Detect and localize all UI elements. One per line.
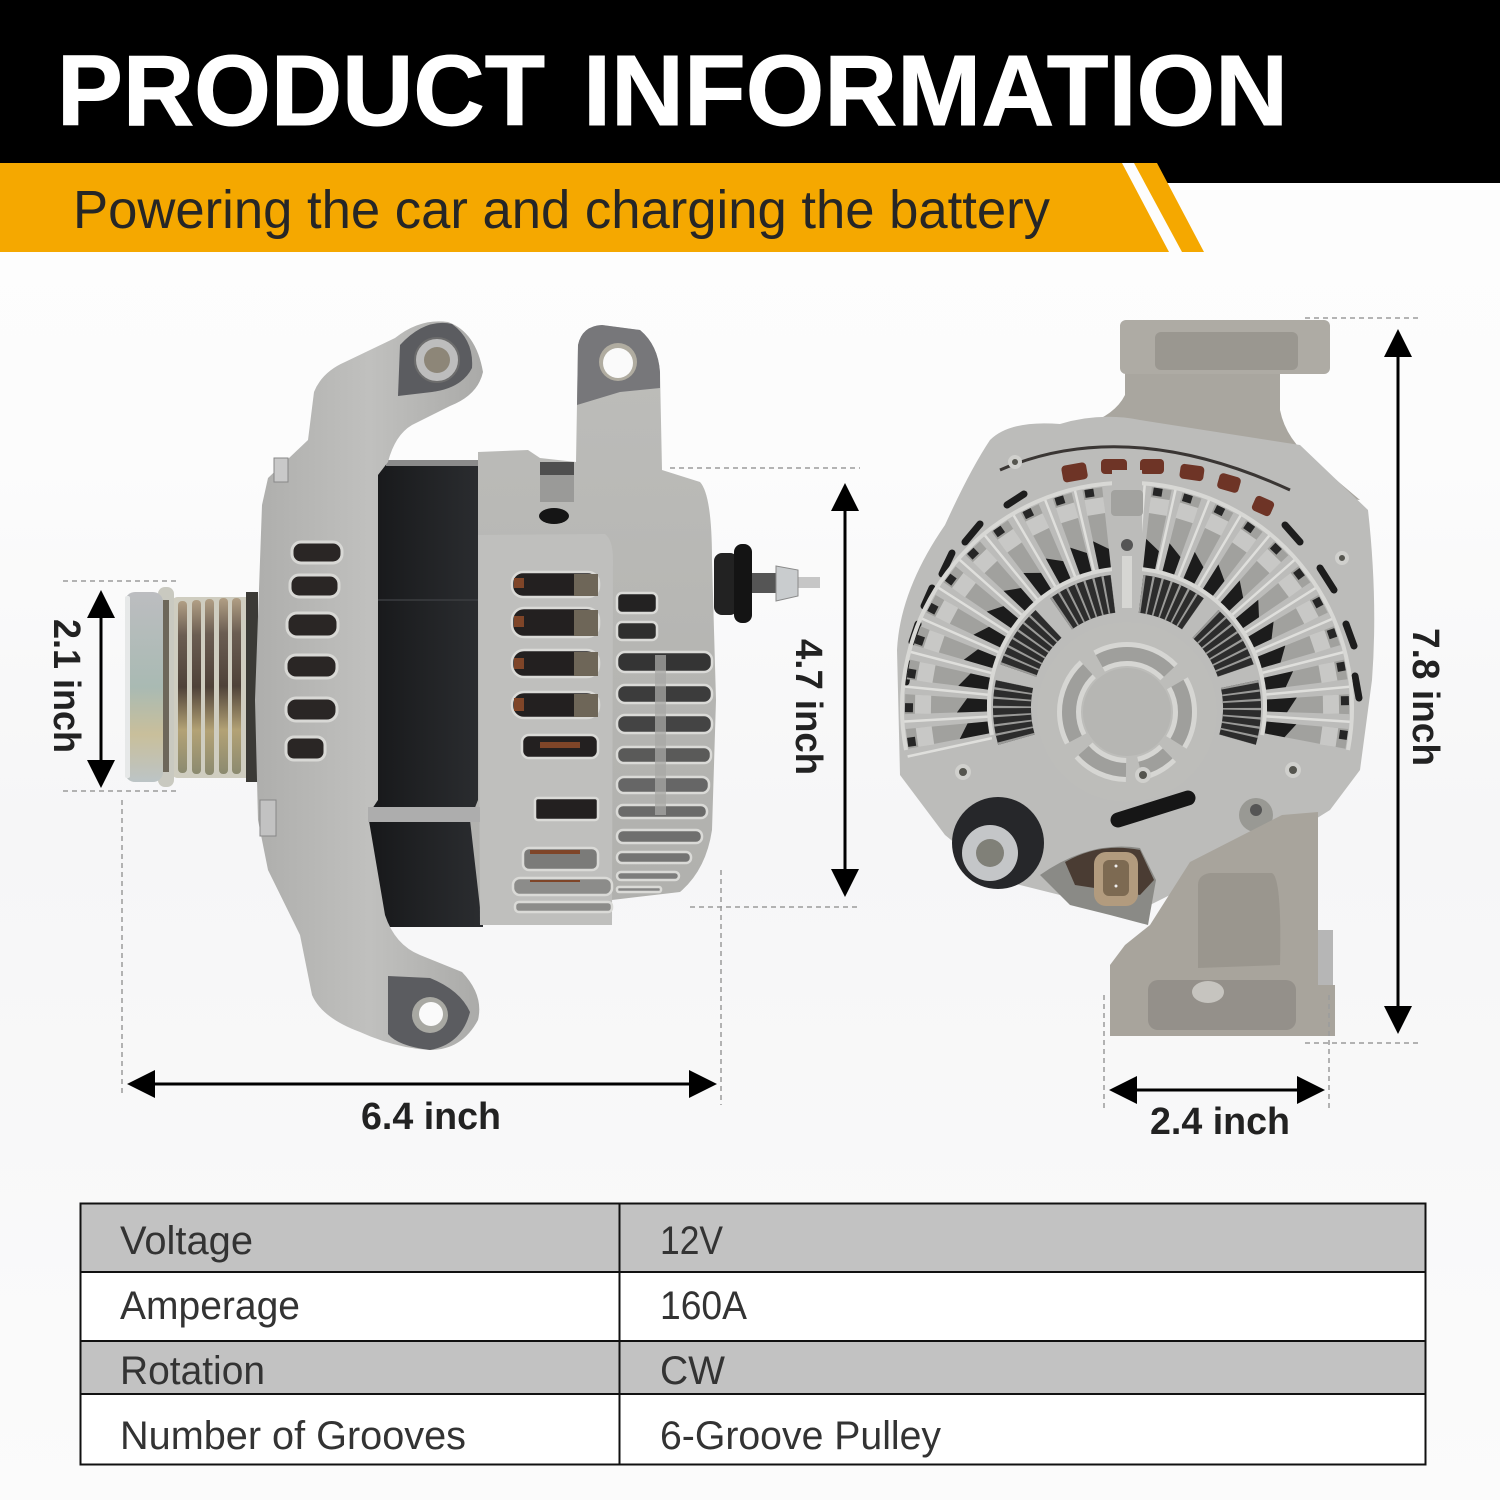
top centre cell <box>1111 470 1143 610</box>
pulley <box>125 587 258 787</box>
output terminal <box>952 797 1044 889</box>
dimension: 2.4 inch: 2.4 inch <box>1150 1101 1290 1143</box>
dimension: 2.1 inch: 2.1 inch <box>45 619 87 753</box>
row: amperage: Amperage <box>120 1284 300 1328</box>
dimension: 2.4 inch <box>1104 995 1329 1143</box>
dimension: 4.7 inch: 4.7 inch <box>787 639 829 775</box>
row: voltage: Voltage <box>120 1219 253 1263</box>
specification table <box>80 1204 1426 1465</box>
outer cooling fins <box>903 484 1351 757</box>
alternator rear view <box>897 320 1374 1036</box>
dimension: 6.4 inch <box>122 800 717 1138</box>
row: voltage: 12V <box>660 1219 723 1263</box>
rear housing <box>470 325 716 925</box>
boss hole <box>1239 798 1273 832</box>
row: amperage <box>81 1272 1425 1341</box>
row: rotation <box>81 1341 1425 1394</box>
main body <box>897 417 1374 905</box>
top bracket neck <box>1085 372 1360 500</box>
row: number of grooves: Number of Grooves <box>120 1414 466 1458</box>
title: INFORMATION <box>583 35 1288 147</box>
front vent slots <box>286 542 342 760</box>
title <box>57 35 1288 147</box>
dimension: 7.8 inch <box>1305 318 1446 1043</box>
dimension: 7.8 inch: 7.8 inch <box>1404 628 1446 766</box>
output terminal <box>714 544 820 623</box>
top collar <box>1000 447 1290 490</box>
oil slot <box>1118 798 1188 820</box>
bottom bracket <box>1110 812 1335 1036</box>
header band <box>0 0 1500 183</box>
row: rotation: Rotation <box>120 1349 265 1393</box>
bottom mounting lug <box>388 976 470 1050</box>
top bracket <box>1120 320 1330 374</box>
copper windings <box>1061 459 1275 517</box>
top mounting lug <box>398 323 472 396</box>
title: PRODUCT <box>57 35 545 147</box>
row: number of grooves: 6-Groove Pulley <box>660 1414 941 1458</box>
casting screws <box>957 457 1347 781</box>
orange ribbon <box>0 163 1204 252</box>
alternator side view <box>125 321 820 1050</box>
rear vent slots <box>512 572 612 912</box>
fin ring ridges <box>902 483 1352 750</box>
side bolts <box>274 458 288 482</box>
through bolt <box>368 807 480 822</box>
raised cap <box>478 534 613 925</box>
dimension: 2.1 inch <box>45 581 178 791</box>
central hub <box>1037 622 1217 802</box>
louvre sectors <box>1011 591 1243 740</box>
connector <box>1040 847 1156 925</box>
row: number of grooves <box>81 1394 1425 1465</box>
table grid <box>80 1204 1426 1464</box>
dimension: 6.4 inch: 6.4 inch <box>361 1096 501 1138</box>
rear fins <box>617 593 712 892</box>
row: amperage: 160A <box>660 1284 747 1328</box>
row: voltage <box>81 1204 1425 1272</box>
outer dark vents <box>906 494 1359 698</box>
stator <box>368 460 483 927</box>
side mounting lug <box>577 325 660 405</box>
upper notch <box>539 462 574 524</box>
subtitle: Powering the car and charging the battery <box>73 180 1050 240</box>
front housing <box>255 321 483 1050</box>
copper windings <box>514 578 580 882</box>
dimension: 4.7 inch <box>670 468 860 1105</box>
row: rotation: CW <box>660 1349 725 1393</box>
